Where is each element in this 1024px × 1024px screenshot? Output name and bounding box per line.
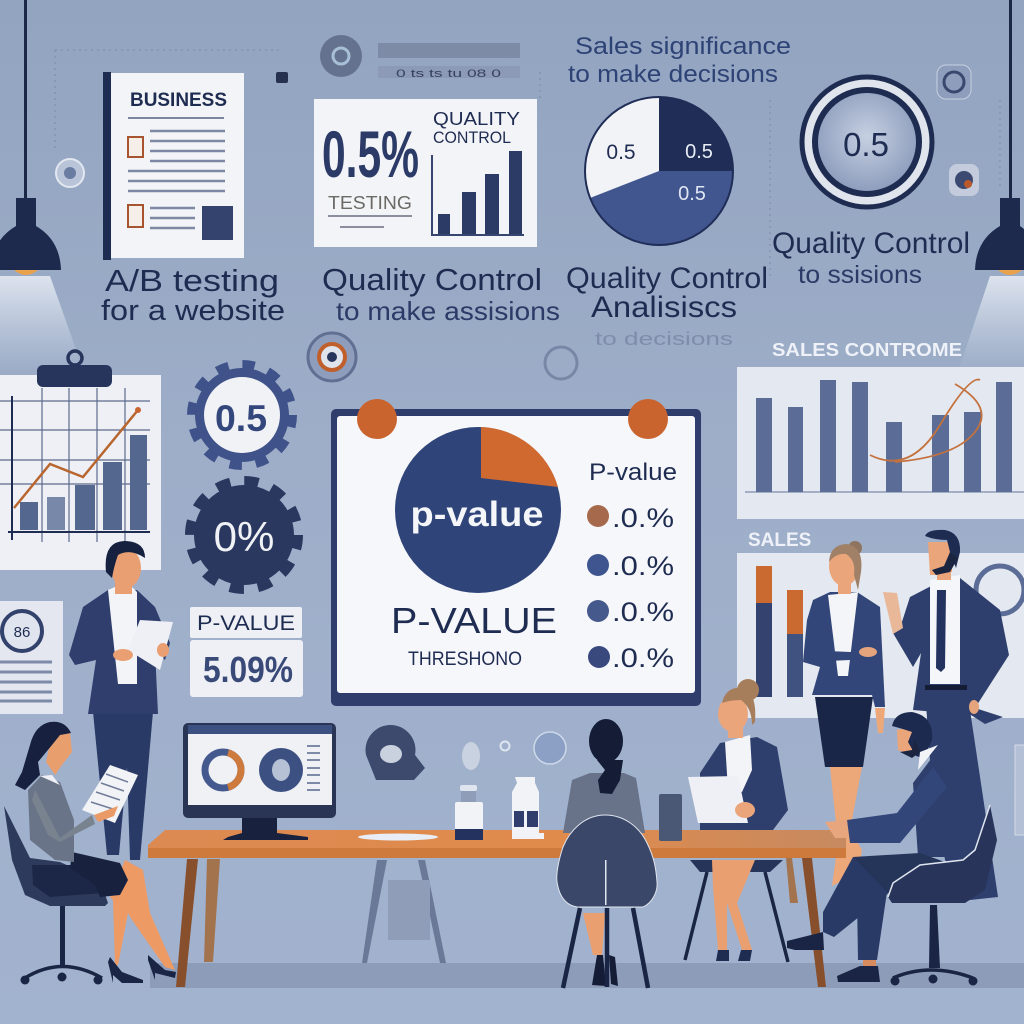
text: A/B testing: for a website [101, 295, 285, 327]
lamp: left pendant [0, 0, 84, 372]
legend: .0.% [612, 597, 674, 627]
card: p-value 5.09% [190, 607, 303, 697]
panel: left line chart with clipboard [0, 351, 161, 570]
chart: pie 0.5 [585, 97, 733, 245]
lamp: right pendant [958, 0, 1024, 372]
heading: sales: SALES [748, 530, 811, 551]
heading: sales control: SALES CONTROME [772, 340, 962, 360]
text: analistics: to decisions [595, 329, 733, 349]
person: seated woman right behind table [685, 679, 788, 962]
text: A/B testing: A/B testing [105, 263, 279, 298]
heading: top right caption: Sales significance [575, 33, 791, 60]
panel: business document [103, 72, 244, 260]
bottles and wall icons [358, 725, 682, 841]
panel: right lower chart [737, 553, 1024, 718]
person: standing-man-overlapping seated woman left [4, 722, 176, 984]
chart: main pie: p-value [410, 495, 544, 534]
text: quality control: Quality Control [322, 262, 542, 297]
person: standing man left [69, 541, 173, 860]
text: quality control to decisions: Quality Control [772, 227, 970, 260]
panel: right bar chart [737, 367, 1024, 519]
torso and arm [28, 775, 95, 862]
faint top icons and caption: 0 ts ts tu 08 0 [396, 68, 501, 80]
skirt [70, 852, 128, 897]
card: p-value 5.09%: P-VALUE [197, 612, 295, 635]
faint top icons and caption [276, 35, 520, 83]
monitor [183, 723, 336, 840]
faint wall frame far right [1015, 745, 1024, 835]
panel: quality control chart card [314, 99, 537, 247]
heading: top right caption [568, 33, 791, 88]
chart: main pie [395, 427, 561, 593]
text: p-value threshold [391, 600, 557, 670]
text: p-value threshold: THRESHONO [408, 649, 522, 670]
legend: P-value [589, 459, 677, 486]
chart: pie 0.5: 0.5 [678, 183, 706, 205]
person: standing woman right [803, 541, 885, 886]
chart: pie 0.5: 0.5 [685, 141, 713, 163]
person: seated man right with chair [787, 712, 997, 986]
text: quality control to decisions [772, 227, 970, 289]
head [15, 722, 72, 790]
text: A/B testing [101, 263, 285, 327]
panel: quality control chart card: 0.5% [322, 117, 419, 191]
panel: business document: BUSINESS [130, 90, 227, 111]
paper [82, 765, 138, 823]
panel: main p-value board [331, 399, 701, 706]
heading: top right caption: to make decisions [568, 61, 778, 88]
chart: pie 0.5: 0.5 [606, 141, 636, 164]
card: small left [0, 601, 63, 714]
text: quality control to decisions: to ssisions [798, 261, 922, 289]
panel: quality control chart card: TESTING [328, 193, 412, 213]
legend [587, 459, 677, 673]
card: small left: 86 [14, 624, 30, 641]
icon: gear 0% [191, 482, 297, 588]
legend: .0.% [612, 643, 674, 673]
faint mid icons [308, 333, 577, 381]
icon: gear 0%: 0% [214, 513, 274, 560]
text: analistics [566, 262, 768, 349]
icon: small badges right [937, 65, 979, 196]
icon: left small badge [56, 159, 84, 187]
text: quality control: to make assisions [336, 296, 560, 326]
legend: .0.% [612, 551, 674, 581]
text: p-value threshold: P-VALUE [391, 600, 557, 641]
panel: quality control chart card: QUALITY [433, 109, 520, 129]
icon: gear 0.5 [193, 366, 291, 464]
table [148, 830, 846, 987]
text: quality control [322, 262, 560, 326]
person: standing man right [883, 530, 1009, 900]
person: back-view woman with chair [557, 719, 657, 988]
panel: quality control chart card: CONTROL [433, 128, 511, 147]
gauge: 0.5 lens [802, 77, 932, 207]
text: analistics: Analisiscs [591, 291, 737, 324]
card: p-value 5.09%: 5.09% [203, 649, 293, 690]
legs and shoes [108, 860, 176, 983]
legend: .0.% [612, 503, 674, 533]
icon: gear 0.5: 0.5 [215, 398, 267, 439]
gauge: 0.5 lens: 0.5 [843, 126, 889, 163]
text: analistics: Quality Control [566, 262, 768, 295]
chair left [4, 806, 108, 984]
